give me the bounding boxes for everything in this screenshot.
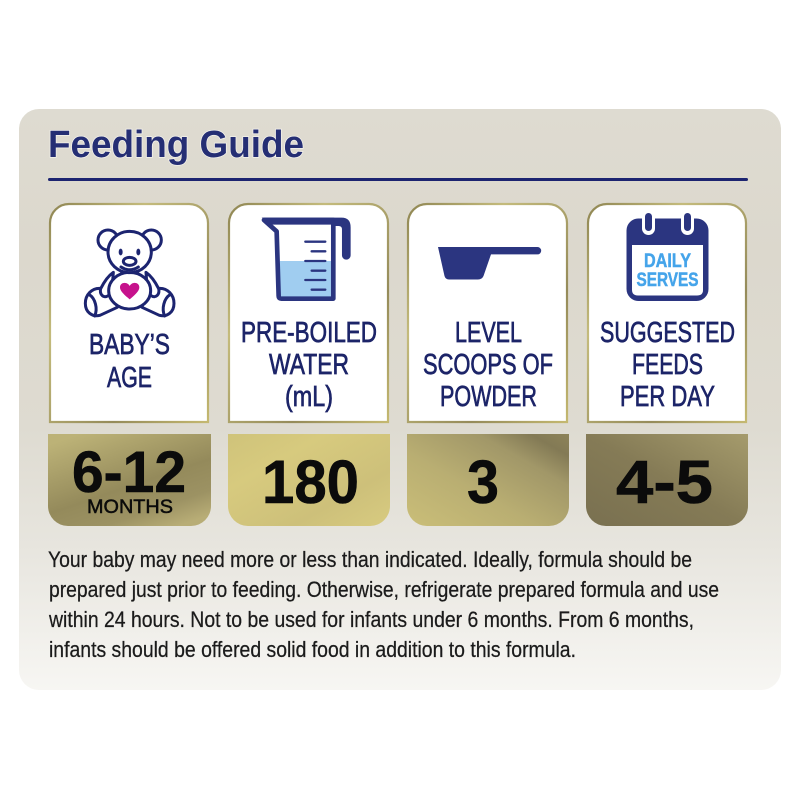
icon: measuring jug (262, 218, 351, 299)
label: level scoops of powder: POWDER (440, 381, 537, 413)
panel: suggested feeds card (588, 204, 746, 422)
label: suggested feeds per day: PER DAY (620, 381, 715, 413)
value: 3 (407, 434, 569, 526)
label: level scoops of powder (423, 317, 553, 413)
panel: pre-boiled water card (229, 204, 388, 422)
value: 6-12 months: MONTHS (87, 496, 173, 518)
label: pre-boiled water: (mL) (285, 381, 333, 413)
label: suggested feeds per day: FEEDS (632, 349, 703, 381)
label: level scoops of powder: SCOOPS OF (423, 349, 553, 381)
label: suggested feeds per day (600, 317, 735, 413)
panel: level scoops card (408, 204, 567, 422)
icon: teddy bear (85, 230, 174, 316)
value: 6-12 months (48, 434, 211, 526)
label: pre-boiled water (241, 317, 377, 413)
value: 4-5 (586, 434, 748, 526)
panel: baby's age card (50, 204, 208, 422)
value: 4-5: 4-5 (616, 448, 713, 516)
text block: feeding note: within 24 hours. Not to be used for infants under 6 months. From 6 months, (48, 607, 694, 632)
label: baby's age: BABY’S (89, 329, 170, 361)
icon: scoop (438, 247, 541, 280)
value: 180 (228, 434, 390, 526)
value: 6-12 months: 6-12 (72, 440, 186, 505)
text block: feeding note: Your baby may need more or less than indicated. Ideally, formula should be (48, 547, 692, 572)
icon: calendar: SERVES (636, 270, 698, 291)
icon: calendar: DAILY (644, 251, 691, 272)
label: suggested feeds per day: SUGGESTED (600, 317, 735, 349)
text block: feeding note (48, 547, 719, 662)
label: pre-boiled water: PRE-BOILED (241, 317, 377, 349)
value: 3: 3 (467, 448, 499, 516)
title: Feeding Guide (48, 124, 304, 166)
label: baby's age: AGE (107, 362, 152, 394)
label: baby's age (89, 329, 170, 394)
icon: calendar (626, 210, 708, 301)
text block: feeding note: infants should be offered solid food in addition to this formula. (49, 637, 576, 662)
panel: feeding guide background (19, 109, 781, 690)
label: level scoops of powder: LEVEL (455, 317, 522, 349)
label: pre-boiled water: WATER (269, 349, 349, 381)
value: 180: 180 (262, 448, 359, 516)
text block: feeding note: prepared just prior to feeding. Otherwise, refrigerate prepared formula and use (49, 577, 719, 602)
